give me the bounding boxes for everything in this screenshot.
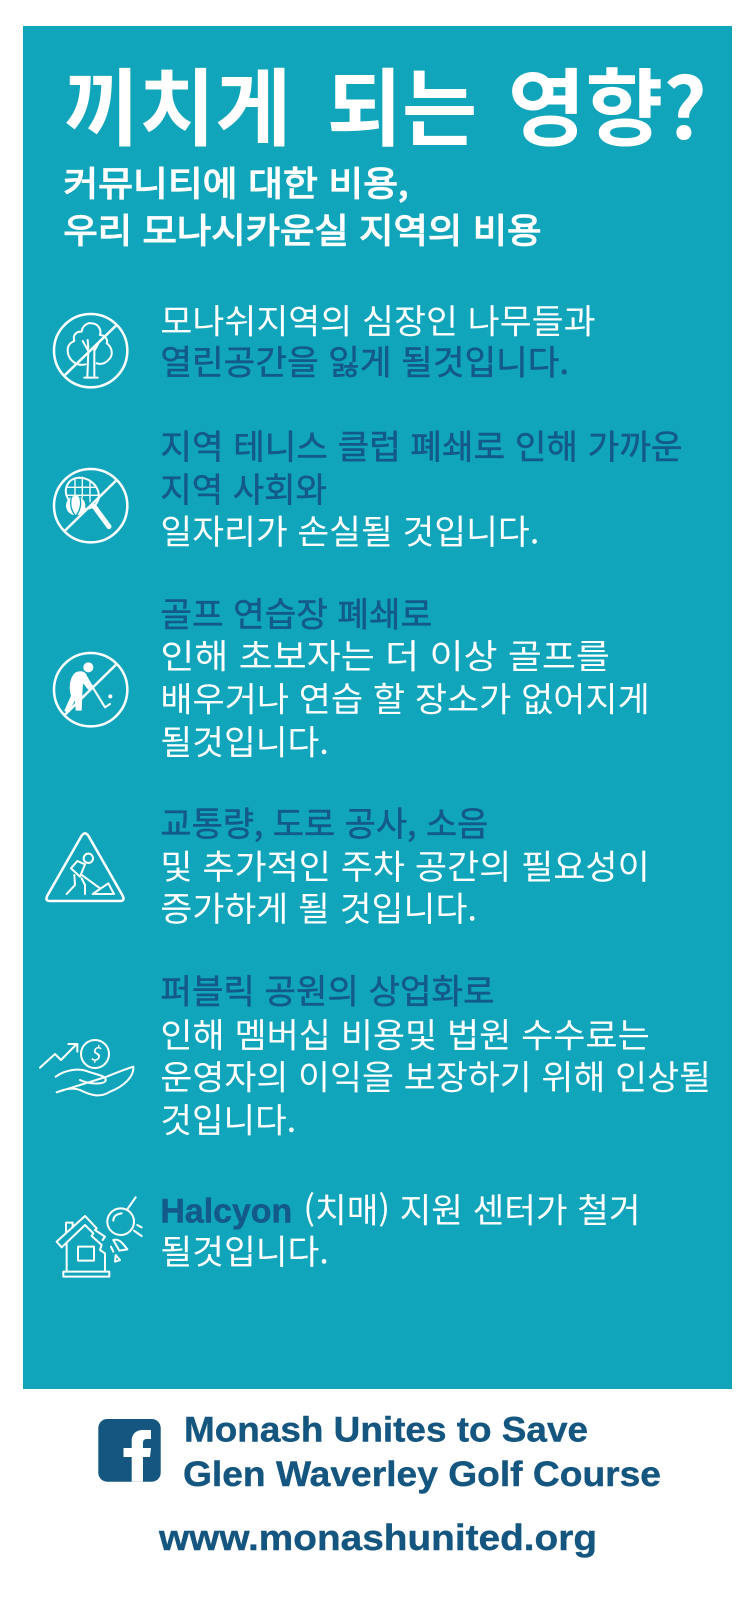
subtitle: 커뮤니티에 대한 비용, [63, 157, 409, 207]
text: traffic: 및 추가적인 주차 공간의 필요성이 [160, 839, 650, 889]
text: commercialisation: 퍼블릭 공원의 상업화로 [160, 964, 494, 1014]
text: Halcyon: (치매) 지원 센터가 철거 [303, 1182, 641, 1232]
icon: no tennis [54, 469, 127, 542]
text: tennis: 지역 사회와 [160, 462, 327, 512]
text: trees [160, 294, 596, 384]
text: traffic: 교통량, 도로 공사, 소음 [160, 796, 488, 846]
icon: rising cost hand: $ [90, 1040, 102, 1067]
title: 되는 [327, 42, 477, 164]
text: commercialisation: 운영자의 이익을 보장하기 위해 인상될 [160, 1050, 711, 1100]
subtitle [63, 157, 541, 254]
icon: facebook [98, 1419, 161, 1482]
text: driving range: 인해 초보자는 더 이상 골프를 [160, 629, 610, 679]
text: tennis: 일자리가 손실될 것입니다. [160, 504, 539, 554]
text: driving range: 될것입니다. [160, 714, 329, 764]
text: commercialisation: 것입니다. [160, 1092, 296, 1142]
text: driving range: 골프 연습장 폐쇄로 [160, 587, 432, 637]
footer: group name [183, 1411, 661, 1494]
footer: group name: Glen Waverley Golf Course [183, 1455, 661, 1494]
icon: road works [46, 833, 124, 901]
icon: house demolition [57, 1197, 142, 1277]
text: Halcyon: 될것입니다. [160, 1224, 329, 1274]
text: driving range [160, 587, 650, 764]
icon: rising cost hand [40, 1040, 133, 1095]
title [63, 42, 707, 164]
text: driving range: 배우거나 연습 할 장소가 없어지게 [160, 672, 650, 722]
text: trees: 모나쉬지역의 심장인 나무들과 [160, 294, 596, 344]
title: 영향? [508, 42, 707, 164]
text: commercialisation: 인해 멤버십 비용및 법원 수수료는 [160, 1008, 650, 1058]
text: traffic [160, 796, 650, 931]
text: tennis: 지역 테니스 클럽 폐쇄로 인해 가까운 [160, 419, 682, 469]
subtitle: 우리 모나시카운실 지역의 비용 [63, 204, 541, 254]
footer: website: www.monashunited.org [158, 1517, 597, 1558]
title: 끼치게 [63, 42, 291, 164]
icon: no trees [54, 314, 127, 387]
text: commercialisation [160, 964, 711, 1142]
text: tennis [160, 419, 682, 554]
icon: no golf [54, 653, 127, 726]
text: Halcyon [160, 1182, 641, 1274]
text: Halcyon: Halcyon [160, 1192, 292, 1230]
text: trees: 열린공간을 잃게 될것입니다. [160, 334, 569, 384]
panel: teal background [23, 26, 732, 1389]
text: traffic: 증가하게 될 것입니다. [160, 881, 477, 931]
footer: group name: Monash Unites to Save [184, 1411, 588, 1450]
